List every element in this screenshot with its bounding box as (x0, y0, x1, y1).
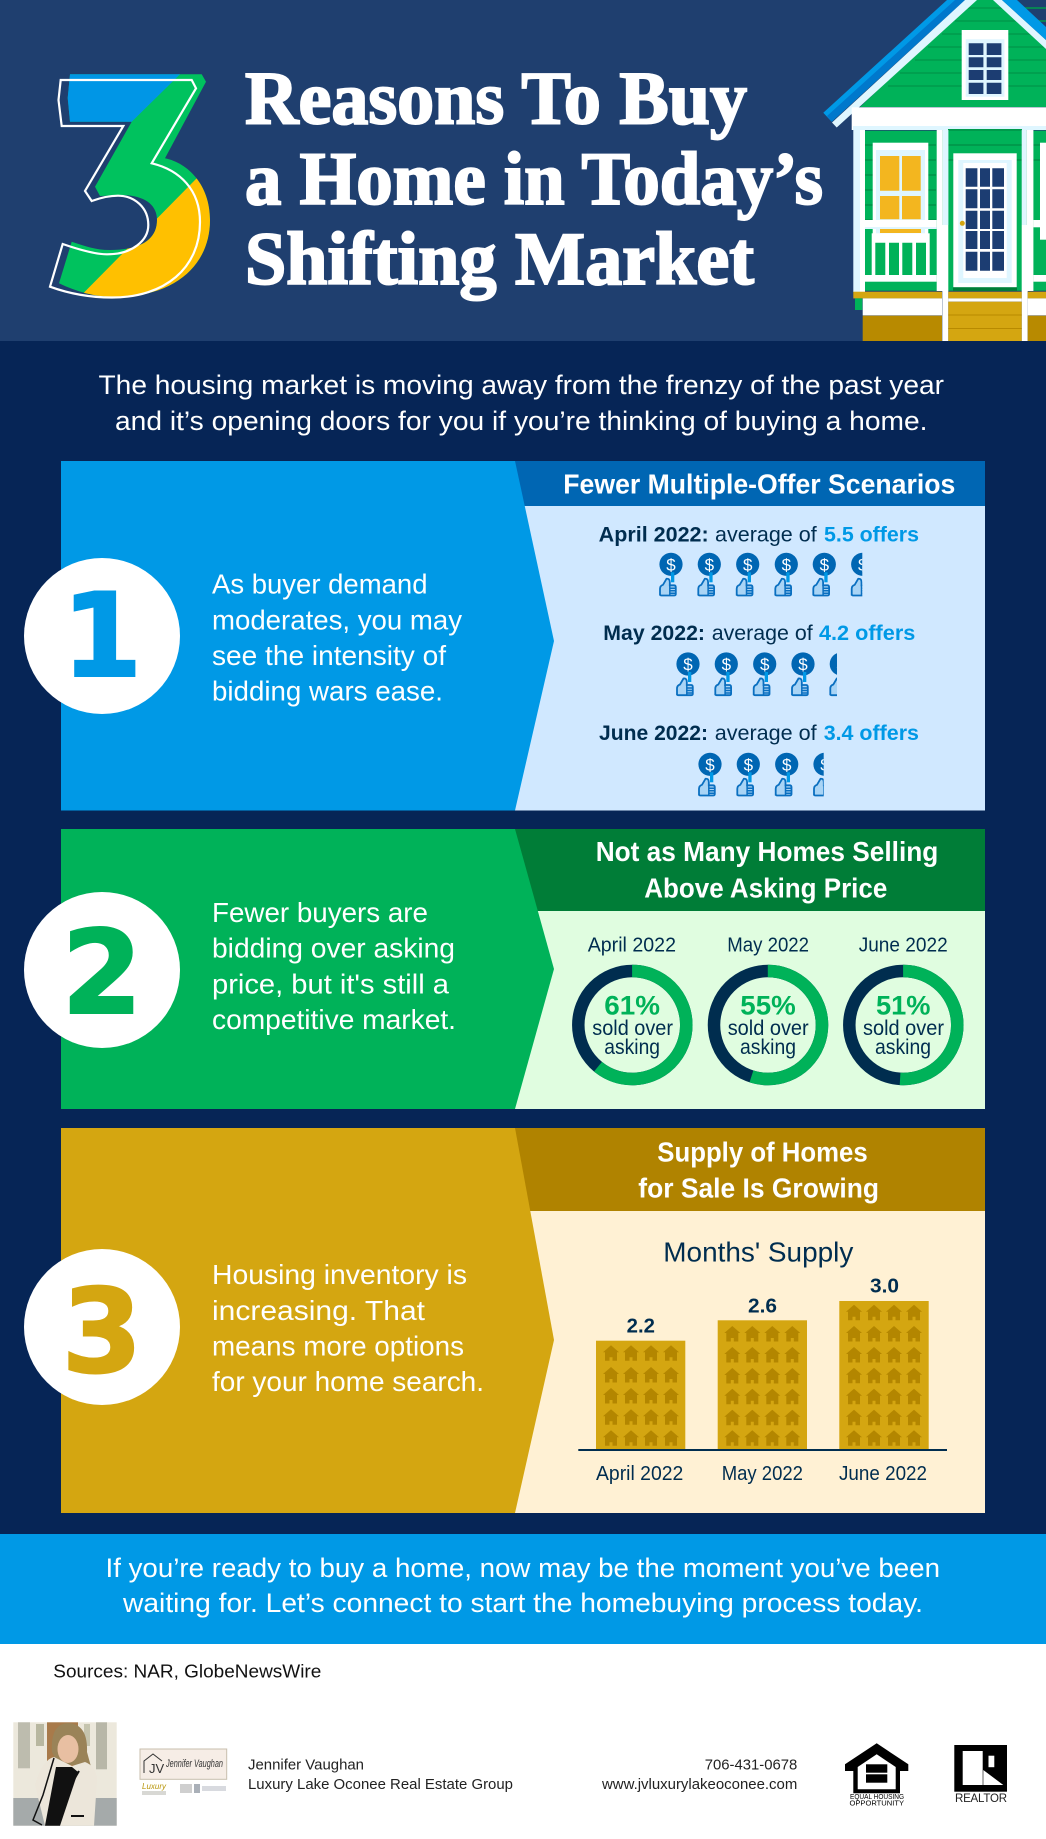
group logo: Luxury (142, 1782, 167, 1791)
icons: may 4.2 offers: $ (798, 655, 808, 674)
june offers line: 3.4 offers (824, 721, 919, 745)
panel 1 body text: moderates, you may (212, 604, 462, 635)
panel 2 body text: price, but it's still a (212, 968, 449, 999)
agent photo (13, 1722, 117, 1826)
header band (0, 0, 1046, 341)
icons: may 4.2 offers: $ (837, 655, 847, 674)
contact details: www.jvluxurylakeoconee.com (601, 1776, 797, 1793)
icons: april 5.5 offers: $ (858, 555, 868, 574)
icon: large number 3 (48, 74, 210, 299)
donut: june 51%: asking (875, 1036, 931, 1059)
june offers line: June 2022: (599, 721, 708, 745)
bar: june 3.0 (839, 1276, 929, 1485)
panel 1 heading: Fewer Multiple-Offer Scenarios (563, 468, 955, 499)
group logo (140, 1749, 227, 1795)
porch (853, 292, 942, 298)
panel 2 header band (515, 829, 985, 911)
icons: april 5.5 offers (659, 553, 874, 596)
bar: april 2.2 (596, 1315, 685, 1485)
bar: april 2.2: April 2022 (596, 1463, 683, 1485)
donut: june 51%: June 2022 (859, 935, 948, 957)
donut: april 61%: 61% (604, 990, 660, 1020)
bar: may 2.6: May 2022 (722, 1463, 803, 1485)
walls (865, 131, 1046, 291)
intro text (98, 370, 944, 436)
icon: equal housing opportunity: EQUAL HOUSING (850, 1792, 904, 1801)
contact details (601, 1757, 797, 1793)
icon: realtor: REALTOR (955, 1793, 1007, 1805)
panel 1 body text (212, 568, 462, 707)
april offers line: average of (715, 523, 817, 547)
panel 1 body text: see the intensity of (212, 640, 446, 671)
intro text: and it’s opening doors for you if you’re thinking of buying a home. (115, 406, 928, 436)
donut: may 55%: 55% (740, 990, 796, 1020)
icon: green house (823, 0, 1046, 341)
panel 3 body text: for your home search. (212, 1366, 484, 1397)
donut: april 61%: asking (604, 1036, 660, 1059)
may offers line: May 2022: (603, 621, 705, 645)
may offers line: 4.2 offers (819, 621, 915, 645)
donut: april 61%: sold over (592, 1017, 673, 1040)
donut: april 61%: April 2022 (588, 935, 676, 957)
panel: fewer multiple-offer scenarios (24, 461, 985, 810)
april offers line: April 2022: (599, 523, 709, 547)
donut: may 55%: sold over (728, 1017, 809, 1040)
roof (823, 0, 965, 122)
icons: june 3.4 offers: $ (820, 755, 830, 774)
panel 3 heading (638, 1137, 879, 1203)
donut: may 55%: asking (740, 1036, 796, 1059)
panel 1 body text: bidding wars ease. (212, 676, 443, 707)
icons: june 3.4 offers: $ (782, 755, 792, 774)
panel 1 number badge: 1 (62, 569, 142, 704)
panel 3 heading: Supply of Homes (657, 1137, 868, 1168)
panel 2 green arrow (61, 829, 554, 1109)
panel 3 number badge (24, 1249, 180, 1405)
panel 1 header band (515, 461, 985, 506)
panel 3 body text (212, 1259, 484, 1397)
panel 1 blue arrow (61, 461, 554, 810)
icons: april 5.5 offers: $ (820, 555, 830, 574)
bar: june 3.0: 3.0 (870, 1276, 899, 1298)
group logo: Jennifer Vaughan (165, 1758, 223, 1770)
may offers line (603, 621, 915, 645)
title: Reasons To Buy (245, 58, 747, 140)
call to action band: waiting for. Let’s connect to start the homebuying process today. (122, 1588, 923, 1618)
icons: may 4.2 offers (676, 652, 853, 695)
door (953, 153, 1017, 287)
icons: may 4.2 offers: $ (722, 655, 732, 674)
donut: april 61% (578, 935, 686, 1079)
donut: june 51%: sold over (863, 1017, 944, 1040)
call to action band: If you’re ready to buy a home, now may be the moment you’ve been (106, 1553, 940, 1583)
panel 3 gold arrow (61, 1128, 554, 1513)
panel: supply of homes (24, 1128, 985, 1513)
panel 1 number badge (24, 558, 180, 714)
bar: may 2.6 (718, 1295, 807, 1485)
june offers line (599, 721, 919, 745)
june offers line: average of (715, 721, 817, 745)
icon: equal housing opportunity (845, 1743, 908, 1808)
agent name (248, 1757, 513, 1793)
icons: april 5.5 offers: $ (705, 555, 715, 574)
april offers line: 5.5 offers (824, 523, 919, 547)
icon: realtor (954, 1745, 1007, 1805)
panel 3 body text: increasing. That (212, 1295, 425, 1326)
panel 2 number badge (24, 892, 180, 1048)
icons: june 3.4 offers: $ (744, 755, 754, 774)
panel: homes selling above asking (24, 829, 985, 1109)
panel 3 body text: Housing inventory is (212, 1259, 467, 1290)
icons: april 5.5 offers: $ (666, 555, 676, 574)
sources: Sources: NAR, GlobeNewsWire (53, 1661, 321, 1681)
contact details: 706-431-0678 (705, 1757, 797, 1774)
agent name: Jennifer Vaughan (248, 1757, 364, 1774)
panel 2 body text: competitive market. (212, 1004, 456, 1035)
railing (865, 220, 937, 227)
icons: april 5.5 offers: $ (782, 555, 792, 574)
icons: june 3.4 offers: $ (705, 755, 715, 774)
panel 2 heading: Not as Many Homes Selling (596, 836, 938, 867)
icon: equal housing opportunity: OPPORTUNITY (850, 1798, 904, 1808)
donut: may 55% (714, 935, 822, 1079)
donut: june 51% (849, 935, 957, 1079)
bar: april 2.2: 2.2 (627, 1315, 655, 1337)
panel 3 body text: means more options (212, 1330, 464, 1362)
group logo: JV (149, 1761, 164, 1776)
donut: may 55%: May 2022 (727, 935, 809, 957)
posts (853, 130, 860, 292)
april offers line (599, 523, 919, 547)
porch beam (852, 107, 1046, 130)
call to action band (0, 1534, 1046, 1644)
title: a Home in Today’s (245, 138, 823, 221)
icons: may 4.2 offers: $ (683, 655, 693, 674)
icons: april 5.5 offers: $ (743, 555, 753, 574)
gable (860, 0, 1046, 107)
panel 2 number badge: 2 (62, 906, 142, 1041)
panel 1 body text: As buyer demand (212, 568, 428, 599)
panel 3 number badge: 3 (62, 1265, 142, 1400)
title (245, 58, 823, 301)
panel 3 heading: for Sale Is Growing (638, 1172, 879, 1203)
intro text: The housing market is moving away from the frenzy of the past year (98, 370, 944, 400)
right side wall window hint (1040, 143, 1046, 240)
panel 2 body text: bidding over asking (212, 933, 455, 964)
title: Shifting Market (245, 218, 754, 301)
panel 2 body text: Fewer buyers are (212, 897, 428, 928)
left window (873, 143, 928, 240)
bar chart: months of supply (578, 1276, 947, 1485)
icons: june 3.4 offers (698, 753, 837, 796)
panel 3 header band (515, 1128, 985, 1211)
icons: may 4.2 offers: $ (760, 655, 770, 674)
gable window (962, 30, 1008, 100)
navy main background (0, 341, 1046, 1534)
may offers line: average of (712, 621, 813, 645)
agent name: Luxury Lake Oconee Real Estate Group (248, 1776, 513, 1793)
chart title: Months' Supply (663, 1237, 853, 1268)
panel 2 body text (212, 897, 456, 1035)
bar: may 2.6: 2.6 (748, 1295, 777, 1317)
bar: june 3.0: June 2022 (839, 1463, 927, 1485)
donut: june 51%: 51% (876, 990, 930, 1020)
panel 2 heading: Above Asking Price (644, 872, 887, 903)
panel 2 heading (596, 836, 938, 903)
